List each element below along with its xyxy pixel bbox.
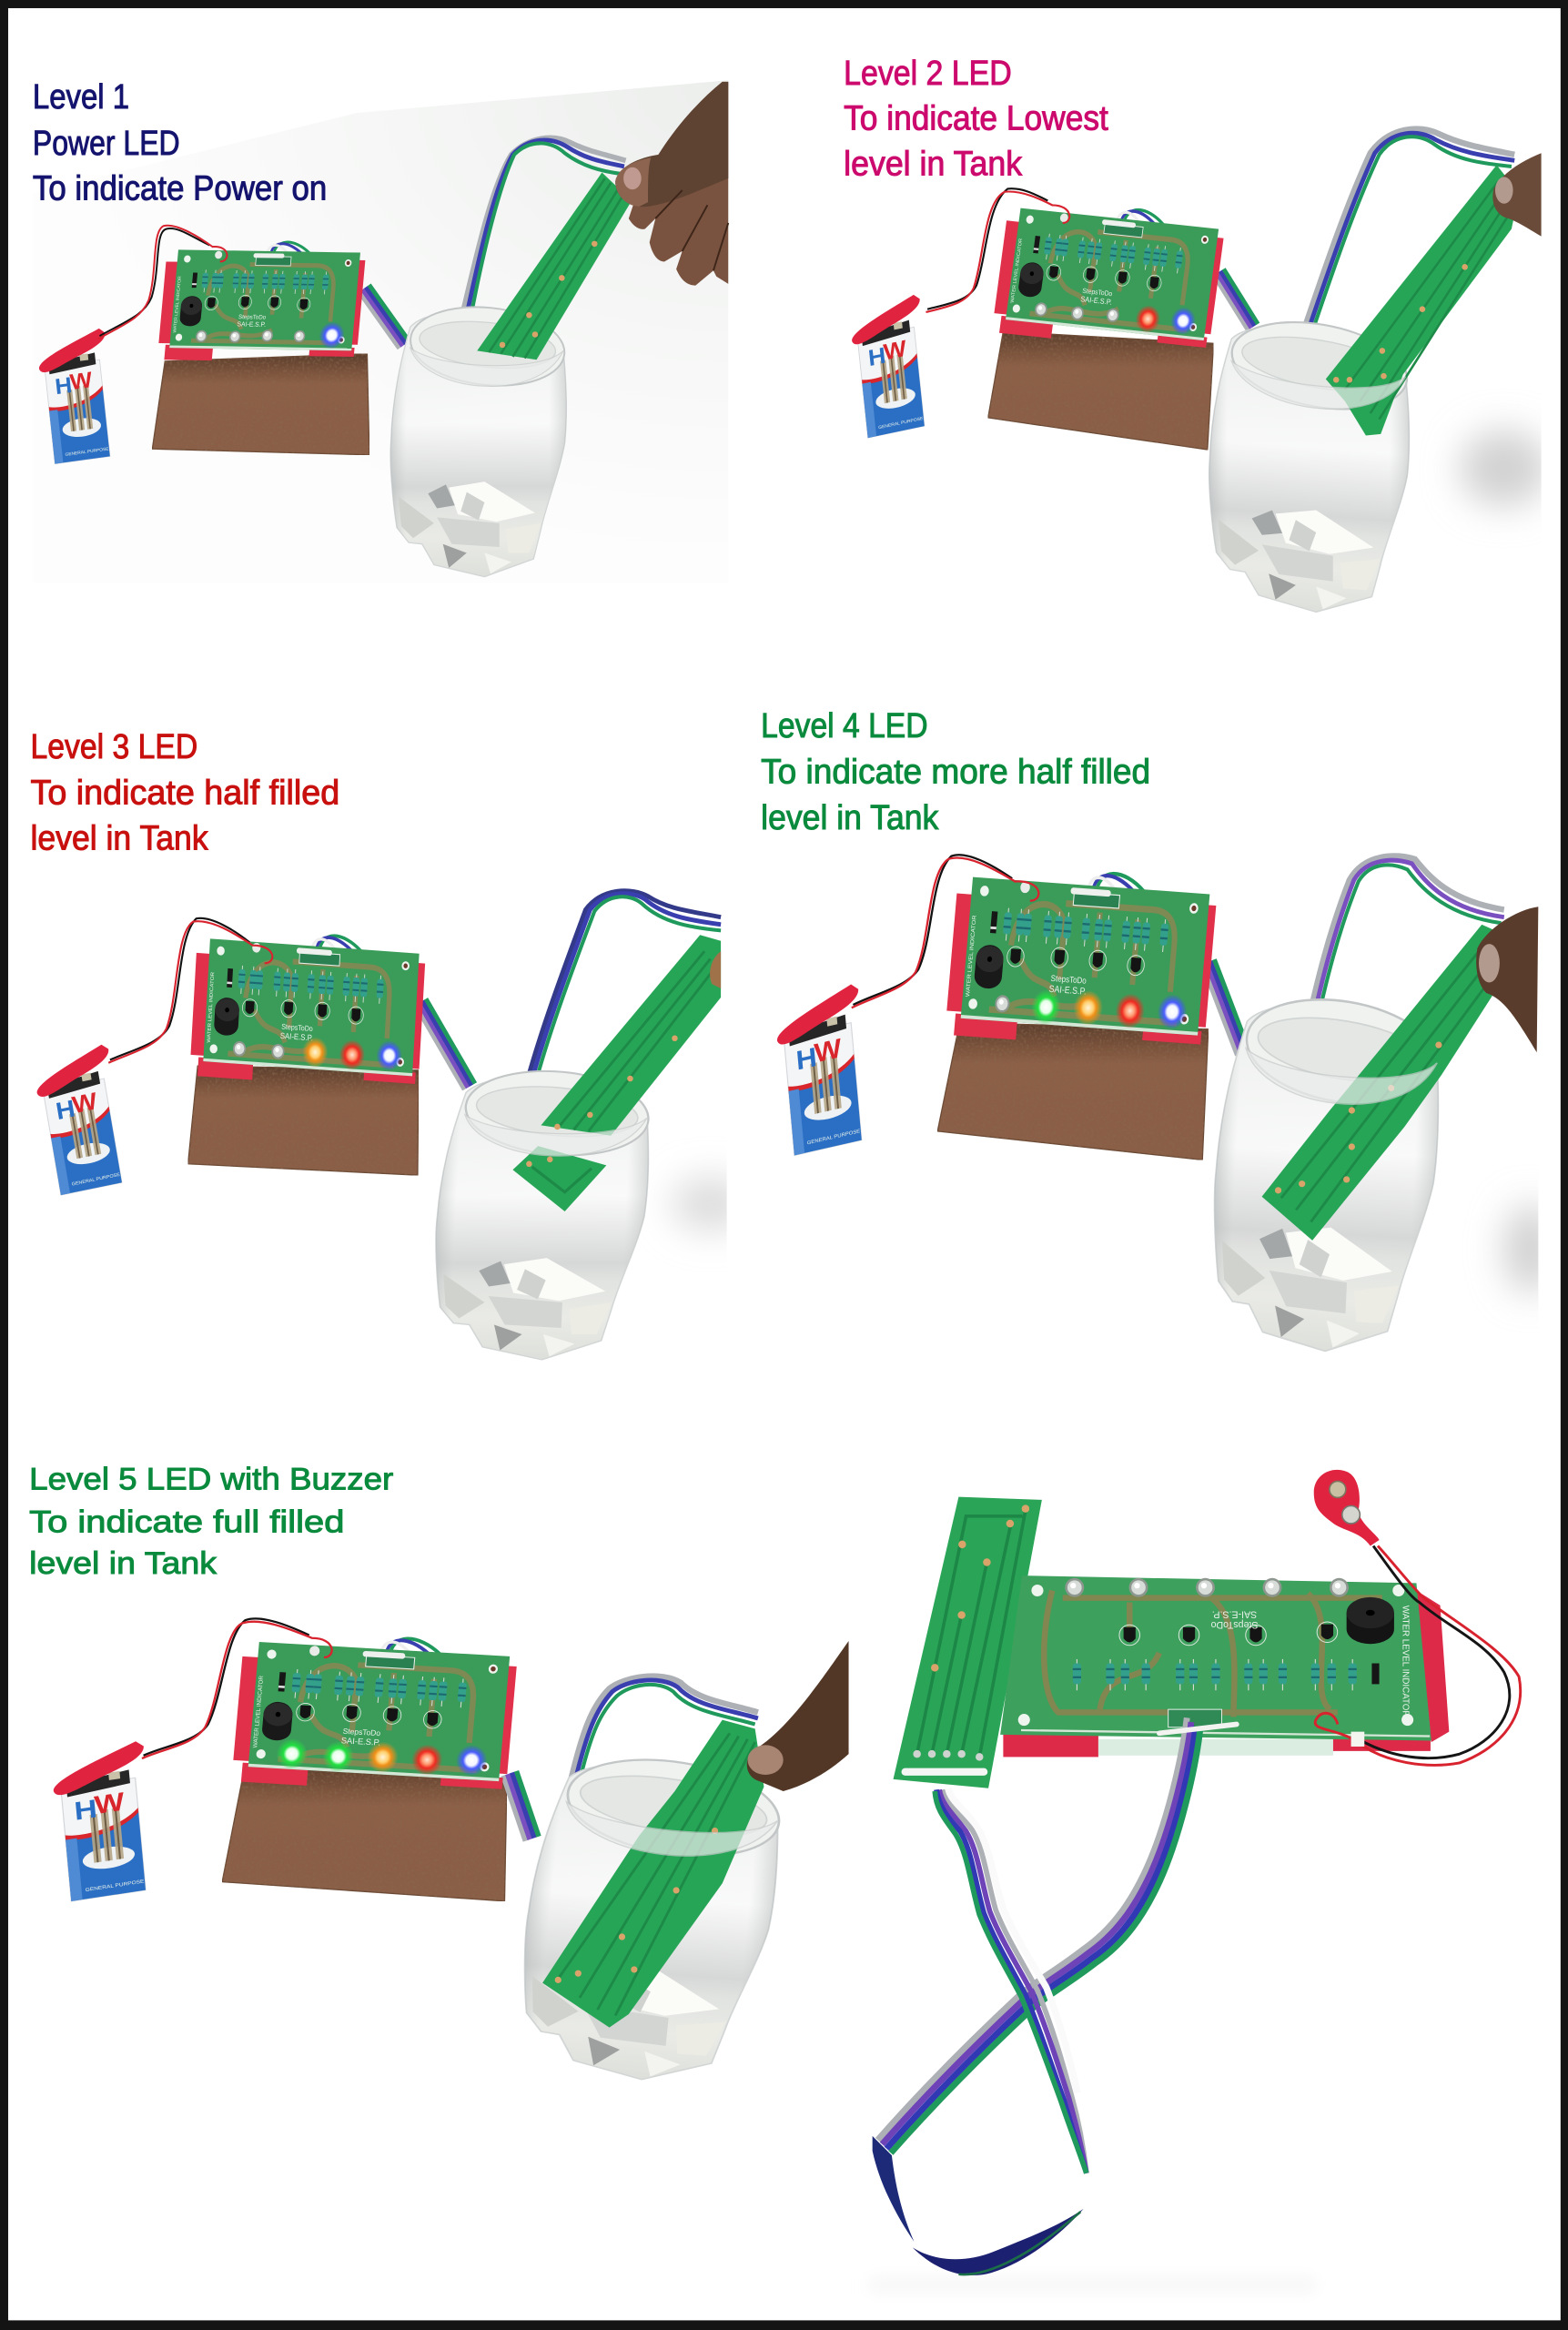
heading: level 3 [30,727,339,857]
circuit board: SAI-E.S.P. [1048,984,1087,998]
heading: level 2: Level 2 LED [844,54,1012,92]
board silk text: WATER LEVEL INDICATOR [1401,1606,1411,1717]
battery: GENERAL PURPOSE [71,1172,121,1188]
battery: GENERAL PURPOSE [807,1129,861,1146]
ribbon cable to probe [571,1677,758,1781]
heading: level 5: level in Tank [29,1546,217,1581]
panel: level 4 [761,706,1558,1357]
ribbon cable to probe [462,137,626,315]
hand [1492,153,1542,237]
battery wires [142,1618,332,1758]
battery: H [794,1041,818,1076]
battery: W [93,1787,126,1819]
battery: W [883,337,908,366]
circuit board: WATER LEVEL INDICATOR [207,972,216,1043]
circuit board [992,197,1226,355]
circuit board: StepsToDo [342,1727,381,1737]
battery: GENERAL PURPOSE [86,1879,145,1893]
circuit board: SAI-E.S.P. [340,1736,381,1748]
battery [35,328,118,464]
battery wires [1315,1546,1521,1765]
buzzer [1347,1597,1394,1644]
wooden base [937,1023,1209,1160]
wooden base [152,354,369,455]
heading: level 2: To indicate Lowest [844,99,1108,137]
wooden base [988,331,1213,450]
panel: level 2 [844,54,1549,619]
battery: W [70,1087,100,1119]
board silk text: SAI-E.S.P. [1212,1608,1257,1619]
glass of water [390,299,569,577]
circuit board: SAI-E.S.P. [280,1030,313,1043]
backdrop shadow [672,1177,749,1231]
LEDs: red and blue lit [1134,302,1198,338]
heading: level 1: Power LED [33,124,180,162]
hand [747,1641,849,1791]
ribbon cable to probe [1305,856,1504,1038]
heading: level 4: Level 4 LED [761,706,928,745]
wooden base [188,1066,419,1175]
hand [710,951,721,988]
cable tie on connector [1159,1724,1237,1733]
reflection under board [1098,1739,1333,1756]
heading: level 5 [29,1462,393,1581]
sensor probe [477,172,632,360]
backdrop shadow [1460,430,1549,507]
circuit board: WATER LEVEL INDICATOR [965,915,978,998]
heading: level 3: level in Tank [30,819,208,857]
ribbon cable loop [873,1717,1200,2275]
heading: level 3: Level 3 LED [30,727,197,765]
red foam supports [1003,1590,1449,1757]
backdrop shadow [1504,1204,1558,1293]
side ribbon cable [359,285,410,349]
LEDs: all lit [275,1734,489,1780]
panel: level 3 [30,727,749,1360]
glass of water [1209,309,1411,619]
battery: H [54,373,74,400]
panel: assembled kit top view [869,1470,1521,2292]
circuit board: SAI-E.S.P. [237,321,266,329]
circuit board: WATER LEVEL INDICATOR [252,1675,265,1748]
glass of water [512,1743,791,2088]
LEDs: green, yellow, red and blue lit [1030,984,1189,1035]
ribbon cable to probe [528,891,721,1079]
wooden base [222,1765,507,1901]
battery wires [852,855,1038,1008]
hand [615,82,728,286]
heading: level 1: Level 1 [33,77,129,116]
glass rim front [1231,361,1406,414]
panel: level 1 [33,77,728,582]
battery: H [73,1794,98,1826]
battery: H [54,1095,77,1125]
battery: W [813,1032,844,1069]
battery wires [108,918,272,1063]
circuit board [189,927,426,1091]
heading: level 2 [844,54,1108,183]
side ribbon cable [1202,959,1249,1056]
circuit board [157,240,367,363]
heading: level 1: To indicate Power on [33,169,327,208]
side ribbon cable [1214,268,1258,330]
circuit board: StepsToDo [1082,287,1113,298]
battery snap connector [1314,1470,1380,1546]
circuit board: StepsToDo [1050,973,1087,986]
LEDs: yellow, red and blue lit [301,1034,403,1073]
battery [31,1043,131,1196]
circuit board: StepsToDo [281,1022,313,1033]
side ribbon cable [415,998,475,1089]
battery wires [926,188,1069,312]
sensor probe [542,1720,764,2028]
heading: level 2: level in Tank [844,145,1022,183]
battery wires [98,226,227,339]
glass of water [1208,985,1447,1357]
battery: GENERAL PURPOSE [878,416,924,431]
battery [774,983,872,1157]
resistors [1073,1659,1380,1690]
heading: level 5: To indicate full filled [29,1504,344,1539]
circuit board: WATER LEVEL INDICATOR [172,276,183,333]
heading: level 4 [761,706,1150,836]
transistors [1119,1622,1338,1646]
circuit board: SAI-E.S.P. [1080,295,1112,307]
glass of water [430,1063,655,1360]
heading: level 1 [33,77,327,208]
battery: H [867,343,887,371]
sensor probe [1326,165,1519,436]
board silk text [1210,1606,1411,1717]
heading: level 4: level in Tank [761,798,939,836]
ribbon cable to probe [1305,129,1514,327]
heading: level 4: To indicate more half filled [761,753,1150,791]
heading: level 5: Level 5 LED with Buzzer [29,1462,393,1496]
clear LEDs [1065,1578,1349,1597]
hand [1476,907,1538,1052]
sensor probe [894,1497,1042,1788]
battery: W [68,368,94,395]
glass rim front [1244,1048,1437,1109]
heading: level 3: To indicate half filled [30,774,339,812]
side ribbon cable [503,1771,539,1841]
glass rim front [463,1115,647,1156]
circuit board: StepsToDo [238,314,267,321]
panel: level 5 [29,1462,849,2088]
sensor probe [512,935,721,1211]
circuit board [945,863,1219,1053]
battery [50,1740,157,1902]
battery: GENERAL PURPOSE [65,447,109,458]
LED: blue lit [318,321,346,350]
circuit board: WATER LEVEL INDICATOR [1010,238,1024,303]
glass rim front [561,1802,778,1863]
battery [848,294,933,439]
sensor probe [1262,925,1495,1241]
circuit board [231,1629,519,1797]
board silk text: StepsToDo [1210,1619,1258,1630]
faint table shadow [869,2277,1315,2292]
photo backdrop [33,80,728,582]
circuit board top view [1000,1575,1431,1740]
glass rim front [410,348,563,386]
